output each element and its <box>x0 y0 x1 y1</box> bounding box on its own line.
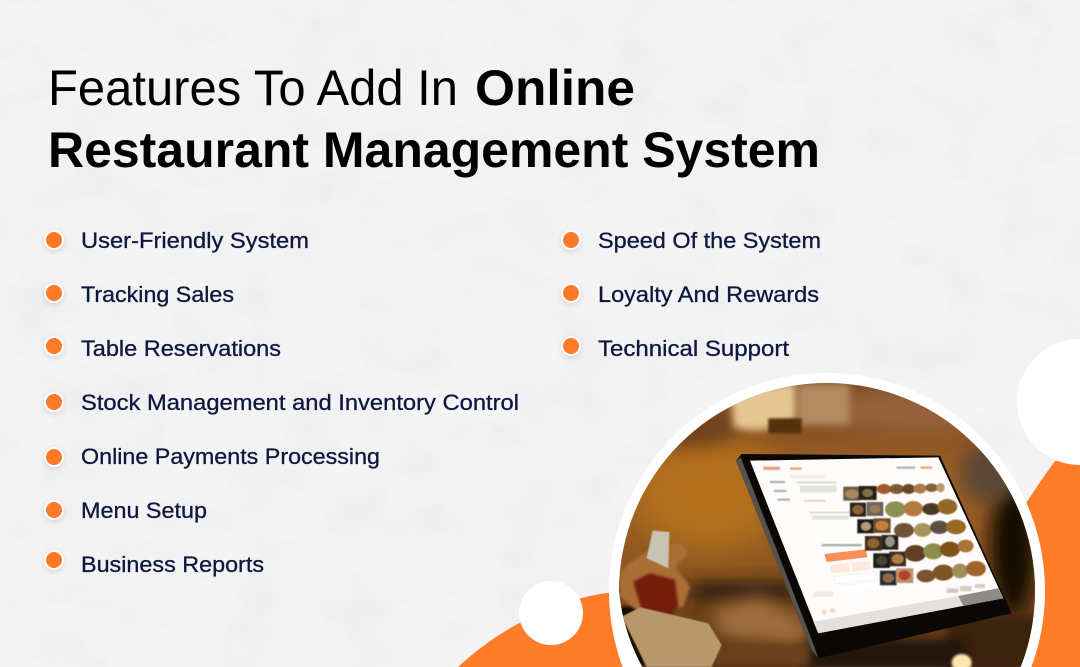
item: Tracking Sales: Tracking Sales <box>81 282 234 307</box>
tablet body <box>736 454 1012 658</box>
orange decorative shapes <box>458 461 1080 667</box>
item: Speed Of the System: Speed Of the System <box>598 228 821 253</box>
right food grid <box>877 483 986 582</box>
item: User-Friendly System: User-Friendly System <box>81 228 309 253</box>
title: Restaurant Management System <box>48 122 820 178</box>
blurred dark table band <box>617 582 810 667</box>
item: Technical Support: Technical Support <box>598 336 789 361</box>
two left columns of photo tiles <box>843 486 913 585</box>
title: Features To Add In <box>48 60 458 116</box>
title <box>48 60 820 178</box>
bottom bar chips <box>947 584 985 593</box>
item: Loyalty And Rewards: Loyalty And Rewards <box>598 282 819 307</box>
tablet screen <box>750 457 1003 633</box>
item: Menu Setup: Menu Setup <box>81 498 207 523</box>
hand holding a card <box>620 531 722 667</box>
item: Table Reservations: Table Reservations <box>81 336 281 361</box>
feature list: left column <box>44 228 519 577</box>
title: Online <box>475 60 635 116</box>
photo: tablet in a restaurant, white ring <box>600 373 1080 667</box>
food tiles <box>843 483 986 585</box>
item: Online Payments Processing: Online Payments Processing <box>81 444 380 469</box>
feature list: right column <box>561 228 821 361</box>
item: Business Reports: Business Reports <box>81 552 264 577</box>
sidebar rows <box>763 467 932 546</box>
white decorative circles <box>519 339 1080 645</box>
order buttons <box>813 549 883 615</box>
item: Stock Management and Inventory Control: Stock Management and Inventory Control <box>81 390 519 415</box>
